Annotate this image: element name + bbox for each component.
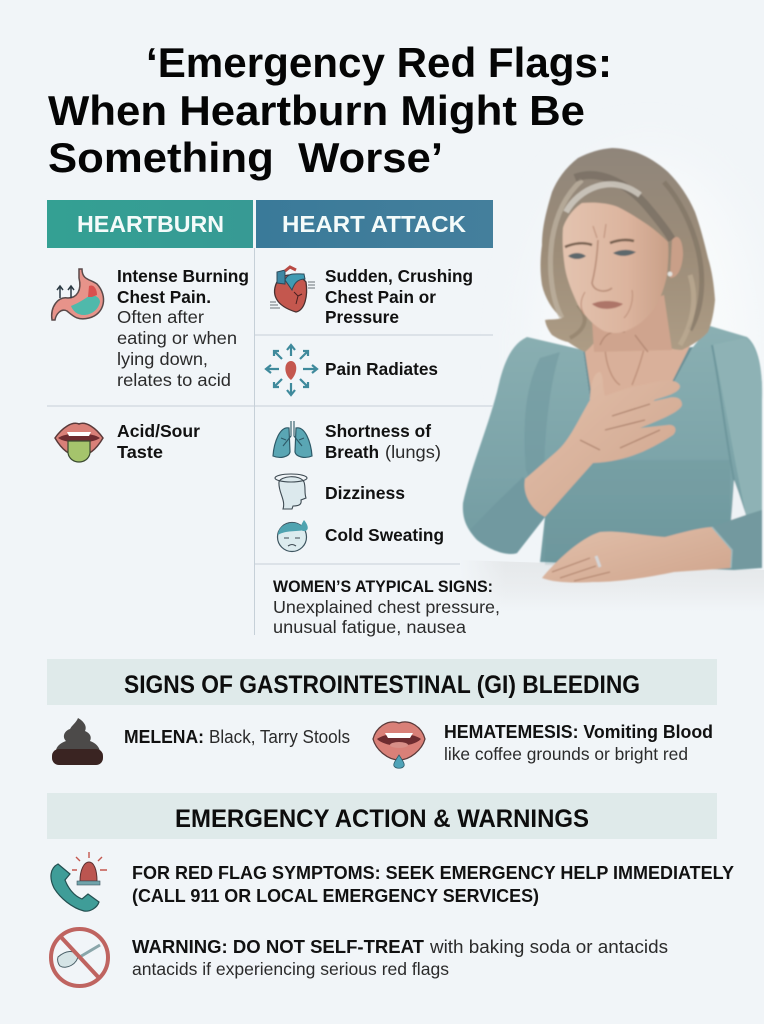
icon: anatomical heart <box>270 267 315 312</box>
text: hematemesis <box>444 721 713 764</box>
table surface <box>460 558 764 614</box>
text: hematemesis: like coffee grounds or bright red <box>444 744 688 764</box>
icon: no baking soda <box>51 929 108 986</box>
text: melena: Black, Tarry Stools <box>209 727 350 747</box>
text: acid sour taste <box>117 421 200 462</box>
heading: emergency action and warnings: EMERGENCY ACTION & WARNINGS <box>175 805 589 833</box>
heading: heartburn: HEARTBURN <box>77 211 224 237</box>
heading: heart attack <box>256 200 493 248</box>
title: When Heartburn Might Be <box>48 87 585 134</box>
text: sudden crushing chest pain: Sudden, Crushing <box>325 266 473 286</box>
icon: cold sweating face <box>278 520 308 552</box>
text: sudden crushing chest pain <box>325 266 473 327</box>
heading: heartburn <box>47 200 253 248</box>
text: seek emergency help: (CALL 911 OR LOCAL EMERGENCY SERVICES) <box>132 885 539 906</box>
text: sudden crushing chest pain: Pressure <box>325 307 399 327</box>
text: do not self-treat: with baking soda or antacids <box>429 937 668 957</box>
text: women's atypical signs: WOMEN’S ATYPICAL SIGNS: <box>273 578 493 596</box>
title <box>48 39 612 181</box>
text: intense burning chest pain: Intense Burning <box>117 266 249 286</box>
text: cold sweating: Cold Sweating <box>325 525 444 545</box>
text: shortness of breath: Breath <box>325 442 379 462</box>
text: shortness of breath: (lungs) <box>385 442 441 462</box>
text: intense burning chest pain: Chest Pain. <box>117 287 211 307</box>
heading: signs of GI bleeding: SIGNS OF GASTROINTESTINAL (GI) BLEEDING <box>124 671 640 699</box>
icon: lungs <box>273 421 312 457</box>
icon: black tarry stool <box>52 718 103 765</box>
text: intense burning chest pain: eating or when <box>117 328 237 348</box>
text: seek emergency help <box>132 862 735 906</box>
icon: mouth with sour tongue <box>55 423 103 462</box>
text: dizziness: Dizziness <box>325 483 405 503</box>
text: intense burning chest pain: lying down, <box>117 349 208 369</box>
text: intense burning chest pain: relates to acid <box>117 370 231 390</box>
text: hematemesis: HEMATEMESIS: Vomiting Blood <box>444 721 713 742</box>
icon: lips with blood drop <box>373 722 425 768</box>
comparison table <box>47 200 500 637</box>
icon: pain radiating from heart <box>266 345 317 395</box>
text: intense burning chest pain <box>117 266 249 390</box>
heading: emergency action and warnings <box>47 793 717 839</box>
text: intense burning chest pain: Often after <box>117 307 204 327</box>
text: shortness of breath <box>325 421 441 462</box>
panel: GI bleeding <box>47 659 717 768</box>
text: pain radiates: Pain Radiates <box>325 359 438 379</box>
text: shortness of breath: Shortness of <box>325 421 431 441</box>
text: sudden crushing chest pain: Chest Pain or <box>325 287 436 307</box>
icon: stomach with acid reflux <box>52 269 104 320</box>
text: do not self-treat: antacids if experiencing serious red flags <box>132 959 449 979</box>
text: do not self-treat <box>132 936 668 979</box>
text: melena <box>124 727 350 747</box>
text: women's atypical signs <box>273 578 500 637</box>
photo: woman holding her chest at a table <box>460 148 764 614</box>
heading: signs of GI bleeding <box>47 659 717 705</box>
text: melena: MELENA: <box>124 727 204 747</box>
icon: dizzy head <box>275 474 307 509</box>
text: seek emergency help: FOR RED FLAG SYMPTOMS: SEEK EMERGENCY HELP IMMEDIATELY <box>132 862 735 883</box>
title: ‘Emergency Red Flags: <box>146 39 612 86</box>
icon: phone with red siren <box>51 852 107 911</box>
title: Something Worse’ <box>48 134 443 181</box>
text: women's atypical signs: unusual fatigue, nausea <box>273 617 466 637</box>
text: acid sour taste: Acid/Sour <box>117 421 200 441</box>
panel: emergency action and warnings <box>47 793 735 986</box>
heading: heart attack: HEART ATTACK <box>282 211 466 237</box>
text: do not self-treat: WARNING: DO NOT SELF-TREAT <box>132 936 425 957</box>
text: acid sour taste: Taste <box>117 442 163 462</box>
text: women's atypical signs: Unexplained chest pressure, <box>273 597 500 617</box>
